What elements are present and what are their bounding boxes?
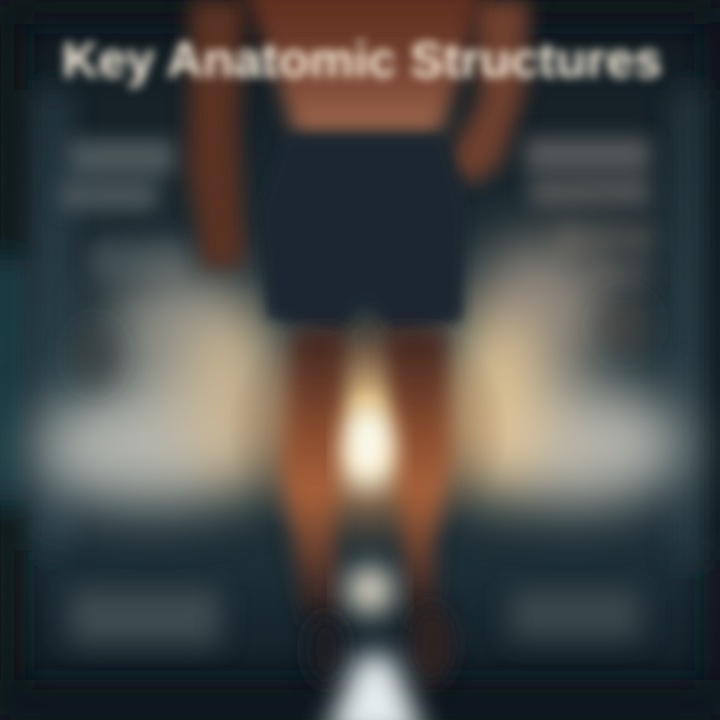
central flare bbox=[346, 414, 394, 614]
figure: torso bbox=[240, 0, 485, 135]
text rows: right bbox=[525, 138, 655, 286]
figure: shoes bbox=[306, 605, 454, 686]
figure: shorts bbox=[258, 135, 465, 330]
smoke cloud bbox=[35, 240, 685, 505]
title: Key Anatomic Structures bbox=[62, 32, 662, 88]
light glow bbox=[228, 300, 508, 560]
figure: legs bbox=[283, 330, 450, 625]
lower text rows bbox=[70, 590, 640, 645]
figure: arms bbox=[188, 0, 530, 270]
dark patches in smoke bbox=[75, 297, 650, 385]
floor light bbox=[325, 655, 425, 720]
text rows: left bbox=[62, 140, 185, 280]
